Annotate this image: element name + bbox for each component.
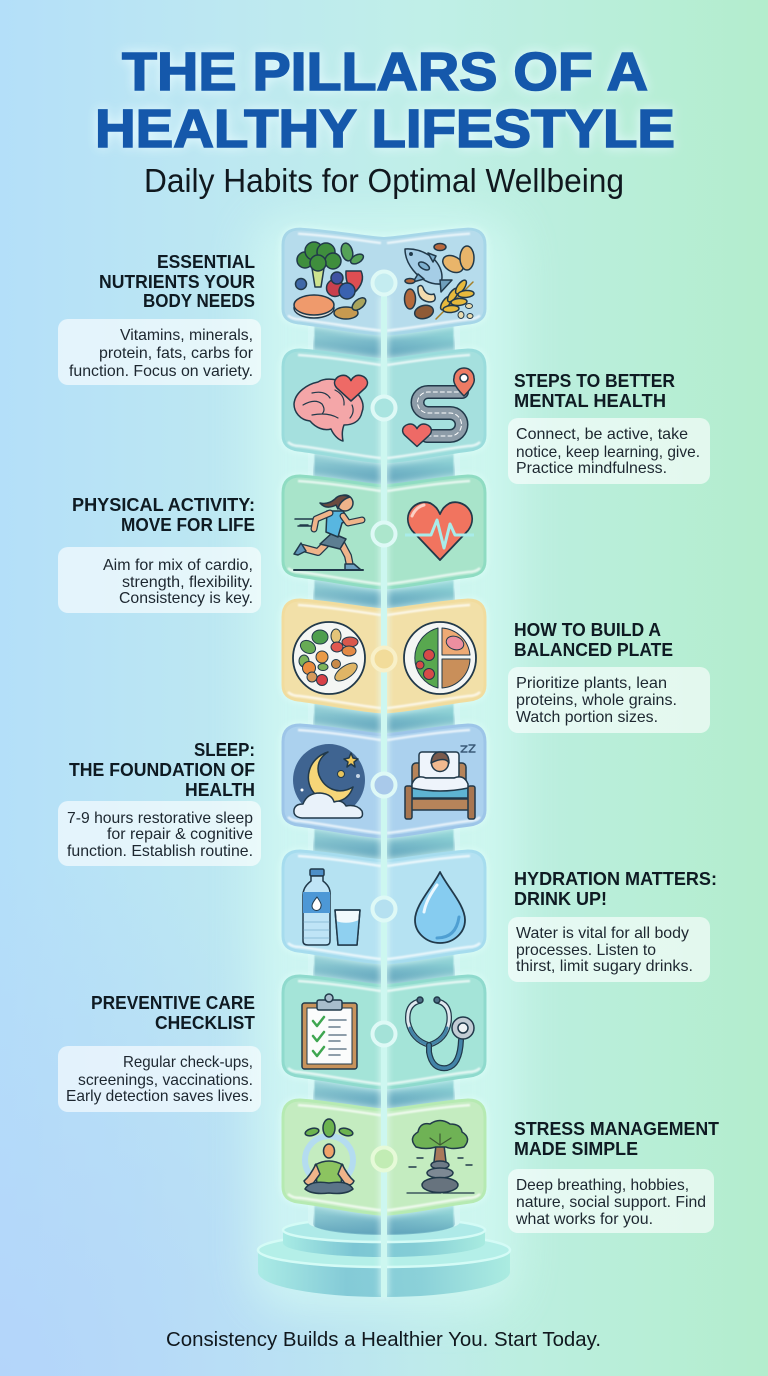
icon: water drop <box>415 872 465 943</box>
icon: meditating person <box>304 1119 354 1194</box>
text block: balanced plate: HOW TO BUILD A <box>514 619 661 640</box>
panel: stress management <box>283 1100 485 1214</box>
text block: mental health: Connect, be active, take <box>516 426 688 443</box>
text block: physical activity: Consistency is key. <box>119 590 253 607</box>
icon: tree on stones <box>407 1120 474 1193</box>
text block: preventive care <box>58 992 261 1112</box>
text block: stress management <box>508 1118 720 1233</box>
icon: person sleeping in bed <box>405 745 475 819</box>
title <box>95 42 675 159</box>
panel: nutrients <box>283 229 485 334</box>
panel: physical activity <box>283 476 485 588</box>
text block: physical activity <box>58 494 261 613</box>
text block: essential nutrients: ESSENTIAL <box>157 251 255 272</box>
text block: balanced plate: BALANCED PLATE <box>514 639 673 660</box>
panel: mental health <box>283 350 485 462</box>
text block: balanced plate <box>508 619 710 733</box>
icon: heart with pulse <box>405 502 474 560</box>
spine nodes <box>372 272 396 1170</box>
text block: mental health <box>508 370 710 484</box>
text block: balanced plate: proteins, whole grains. <box>516 692 677 709</box>
text block: physical activity: Aim for mix of cardio, <box>103 557 253 574</box>
icon: clipboard checklist <box>302 994 357 1069</box>
title: THE PILLARS OF A <box>122 42 648 102</box>
icon: brain with heart <box>294 375 367 441</box>
text block: balanced plate: Watch portion sizes. <box>516 709 658 726</box>
text block: physical activity: MOVE FOR LIFE <box>121 514 255 535</box>
text block: mental health: STEPS TO BETTER <box>514 370 675 391</box>
text block: preventive care: Early detection saves lives. <box>66 1088 253 1105</box>
text block: mental health: notice, keep learning, give. <box>516 444 700 461</box>
text block: physical activity: PHYSICAL ACTIVITY: <box>72 494 255 515</box>
text block: hydration: processes. Listen to <box>516 942 656 959</box>
pillar base <box>258 1218 510 1297</box>
text block: stress management: nature, social support. Find <box>516 1194 706 1211</box>
text block: physical activity: strength, flexibility. <box>122 574 253 591</box>
text block: preventive care: Regular check-ups, <box>123 1054 253 1071</box>
icon: moon and cloud <box>293 744 365 818</box>
text block: preventive care: PREVENTIVE CARE <box>91 992 255 1013</box>
icon: winding road <box>403 368 474 446</box>
text block: preventive care: CHECKLIST <box>155 1012 256 1033</box>
text block: essential nutrients <box>58 251 261 385</box>
text block: stress management: STRESS MANAGEMENT <box>514 1118 720 1139</box>
footer tagline: Consistency Builds a Healthier You. Start Today. <box>166 1329 601 1351</box>
text block: sleep: for repair & cognitive <box>107 826 253 843</box>
text block: sleep: SLEEP: <box>194 739 255 760</box>
text block: mental health: MENTAL HEALTH <box>514 390 666 411</box>
text block: essential nutrients: function. Focus on variety. <box>69 363 253 380</box>
icon: runner <box>294 495 363 570</box>
text block: hydration: DRINK UP! <box>514 888 607 909</box>
text block: sleep: HEALTH <box>185 779 255 800</box>
text block: sleep: THE FOUNDATION OF <box>69 759 255 780</box>
icon: plate of mixed foods <box>293 622 365 694</box>
text block: stress management: what works for you. <box>515 1211 653 1228</box>
text block: stress management: MADE SIMPLE <box>514 1138 638 1159</box>
icon: divided plate <box>404 622 476 694</box>
text block: essential nutrients: Vitamins, minerals, <box>120 327 253 344</box>
pillar cylinder <box>308 300 460 1234</box>
panel: balanced plate <box>283 600 485 712</box>
text block: essential nutrients: NUTRIENTS YOUR <box>99 271 255 292</box>
text block: hydration: thirst, limit sugary drinks. <box>516 958 693 975</box>
panel: preventive care <box>283 976 485 1088</box>
text block: essential nutrients: BODY NEEDS <box>143 290 255 311</box>
text block: hydration: Water is vital for all body <box>516 925 689 942</box>
text block: sleep <box>58 739 261 866</box>
panel: hydration <box>283 851 485 963</box>
text block: preventive care: screenings, vaccinations. <box>78 1072 253 1089</box>
text block: balanced plate: Prioritize plants, lean <box>516 675 667 692</box>
text block: hydration <box>508 868 717 982</box>
text block: sleep: 7-9 hours restorative sleep <box>67 810 253 827</box>
text block: hydration: HYDRATION MATTERS: <box>514 868 717 889</box>
subtitle: Daily Habits for Optimal Wellbeing <box>144 162 624 199</box>
text block: mental health: Practice mindfulness. <box>516 460 667 477</box>
icon: water bottle and glass <box>303 869 360 945</box>
panel: sleep <box>283 725 485 837</box>
icon: healthy foods <box>294 242 474 321</box>
pillar shading <box>313 330 455 1235</box>
icon: stethoscope <box>408 997 474 1068</box>
center spine <box>379 296 389 1297</box>
text block: essential nutrients: protein, fats, carbs for <box>99 345 254 362</box>
title: HEALTHY LIFESTYLE <box>95 99 675 159</box>
text block: stress management: Deep breathing, hobbies, <box>516 1177 689 1194</box>
text block: sleep: function. Establish routine. <box>67 843 253 860</box>
